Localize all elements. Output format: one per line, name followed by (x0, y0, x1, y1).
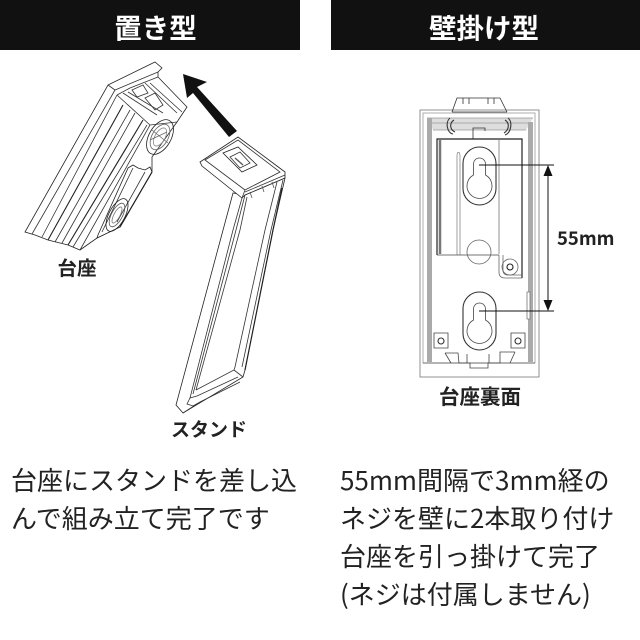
illustration: base unit (25, 62, 187, 250)
heading: wall-mounted type (331, 0, 640, 50)
illustration: stand (176, 137, 285, 413)
label: base: 台座 (57, 252, 97, 281)
top keyhole (463, 147, 496, 205)
label: 55mm: 55mm (557, 225, 614, 251)
text block: wall-mounted description: 台座を引っ掛けて完了 (340, 537, 600, 574)
label: back of base: 台座裏面 (439, 380, 521, 410)
text block: wall-mounted description (340, 461, 614, 612)
text block: placed type description: 台座にスタンドを差し込 (11, 461, 297, 498)
bottom keyhole (463, 292, 496, 350)
heading: placed type: 置き型 (114, 6, 197, 46)
heading: wall-mounted type: 壁掛け型 (429, 6, 539, 46)
heading: placed type (0, 0, 300, 50)
dimension: 55mm arrow (479, 165, 554, 311)
text block: wall-mounted description: ネジを壁に2本取り付け (340, 499, 614, 536)
text block: wall-mounted description: (ネジは付属しません) (340, 575, 591, 612)
text block: placed type description (11, 461, 297, 536)
text block: wall-mounted description: 55mm間隔で3mm経の (340, 461, 610, 498)
text block: placed type description: んで組み立て完了です (11, 499, 270, 536)
illustration: back of base unit (420, 98, 539, 377)
label: stand: スタンド (171, 415, 247, 442)
icon: upward arrow (183, 74, 237, 137)
